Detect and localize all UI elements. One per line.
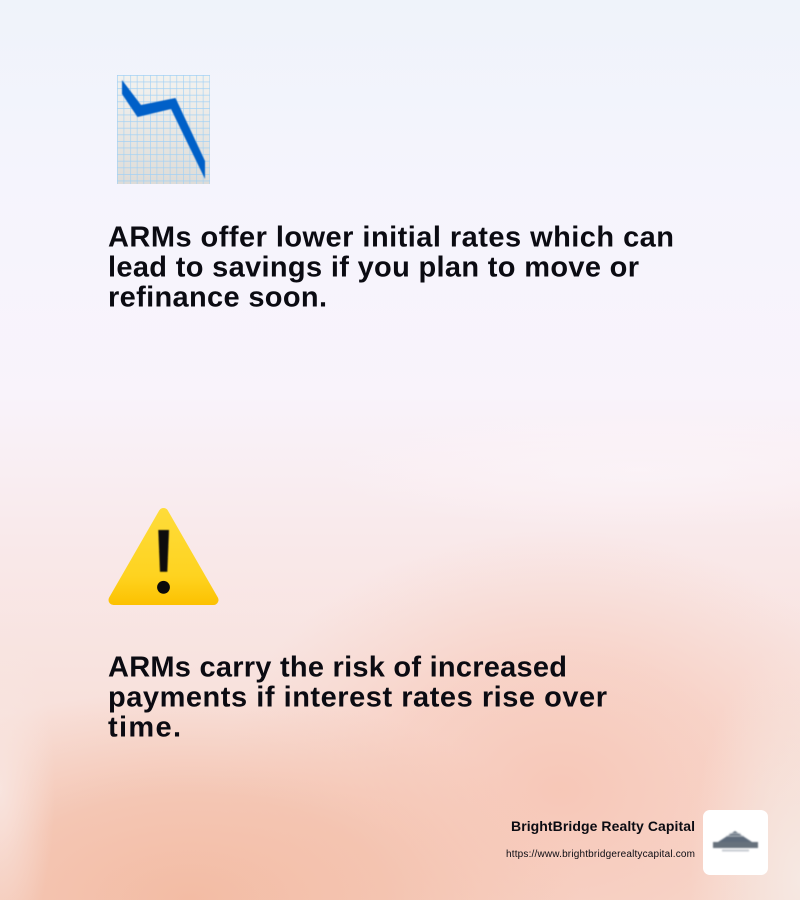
text block: ARMs savings: lead to savings if you plan to move or [108,252,639,284]
icon: warning triangle [114,513,214,600]
text block: ARMs risk: payments if interest rates rise over [108,682,607,714]
company name: BrightBridge Realty Capital [511,818,695,834]
text block: ARMs savings: ARMs offer lower initial rates which can [108,222,674,254]
logo card [703,810,768,875]
text block: ARMs risk [108,652,607,744]
text block: ARMs risk: ARMs carry the risk of increased [108,652,567,684]
icon: falling line chart [117,75,210,184]
company url: https://www.brightbridgerealtycapital.com [506,849,695,860]
text block: ARMs risk: time. [108,712,181,744]
text block: ARMs savings: refinance soon. [108,282,327,314]
text block: ARMs savings [108,222,674,314]
